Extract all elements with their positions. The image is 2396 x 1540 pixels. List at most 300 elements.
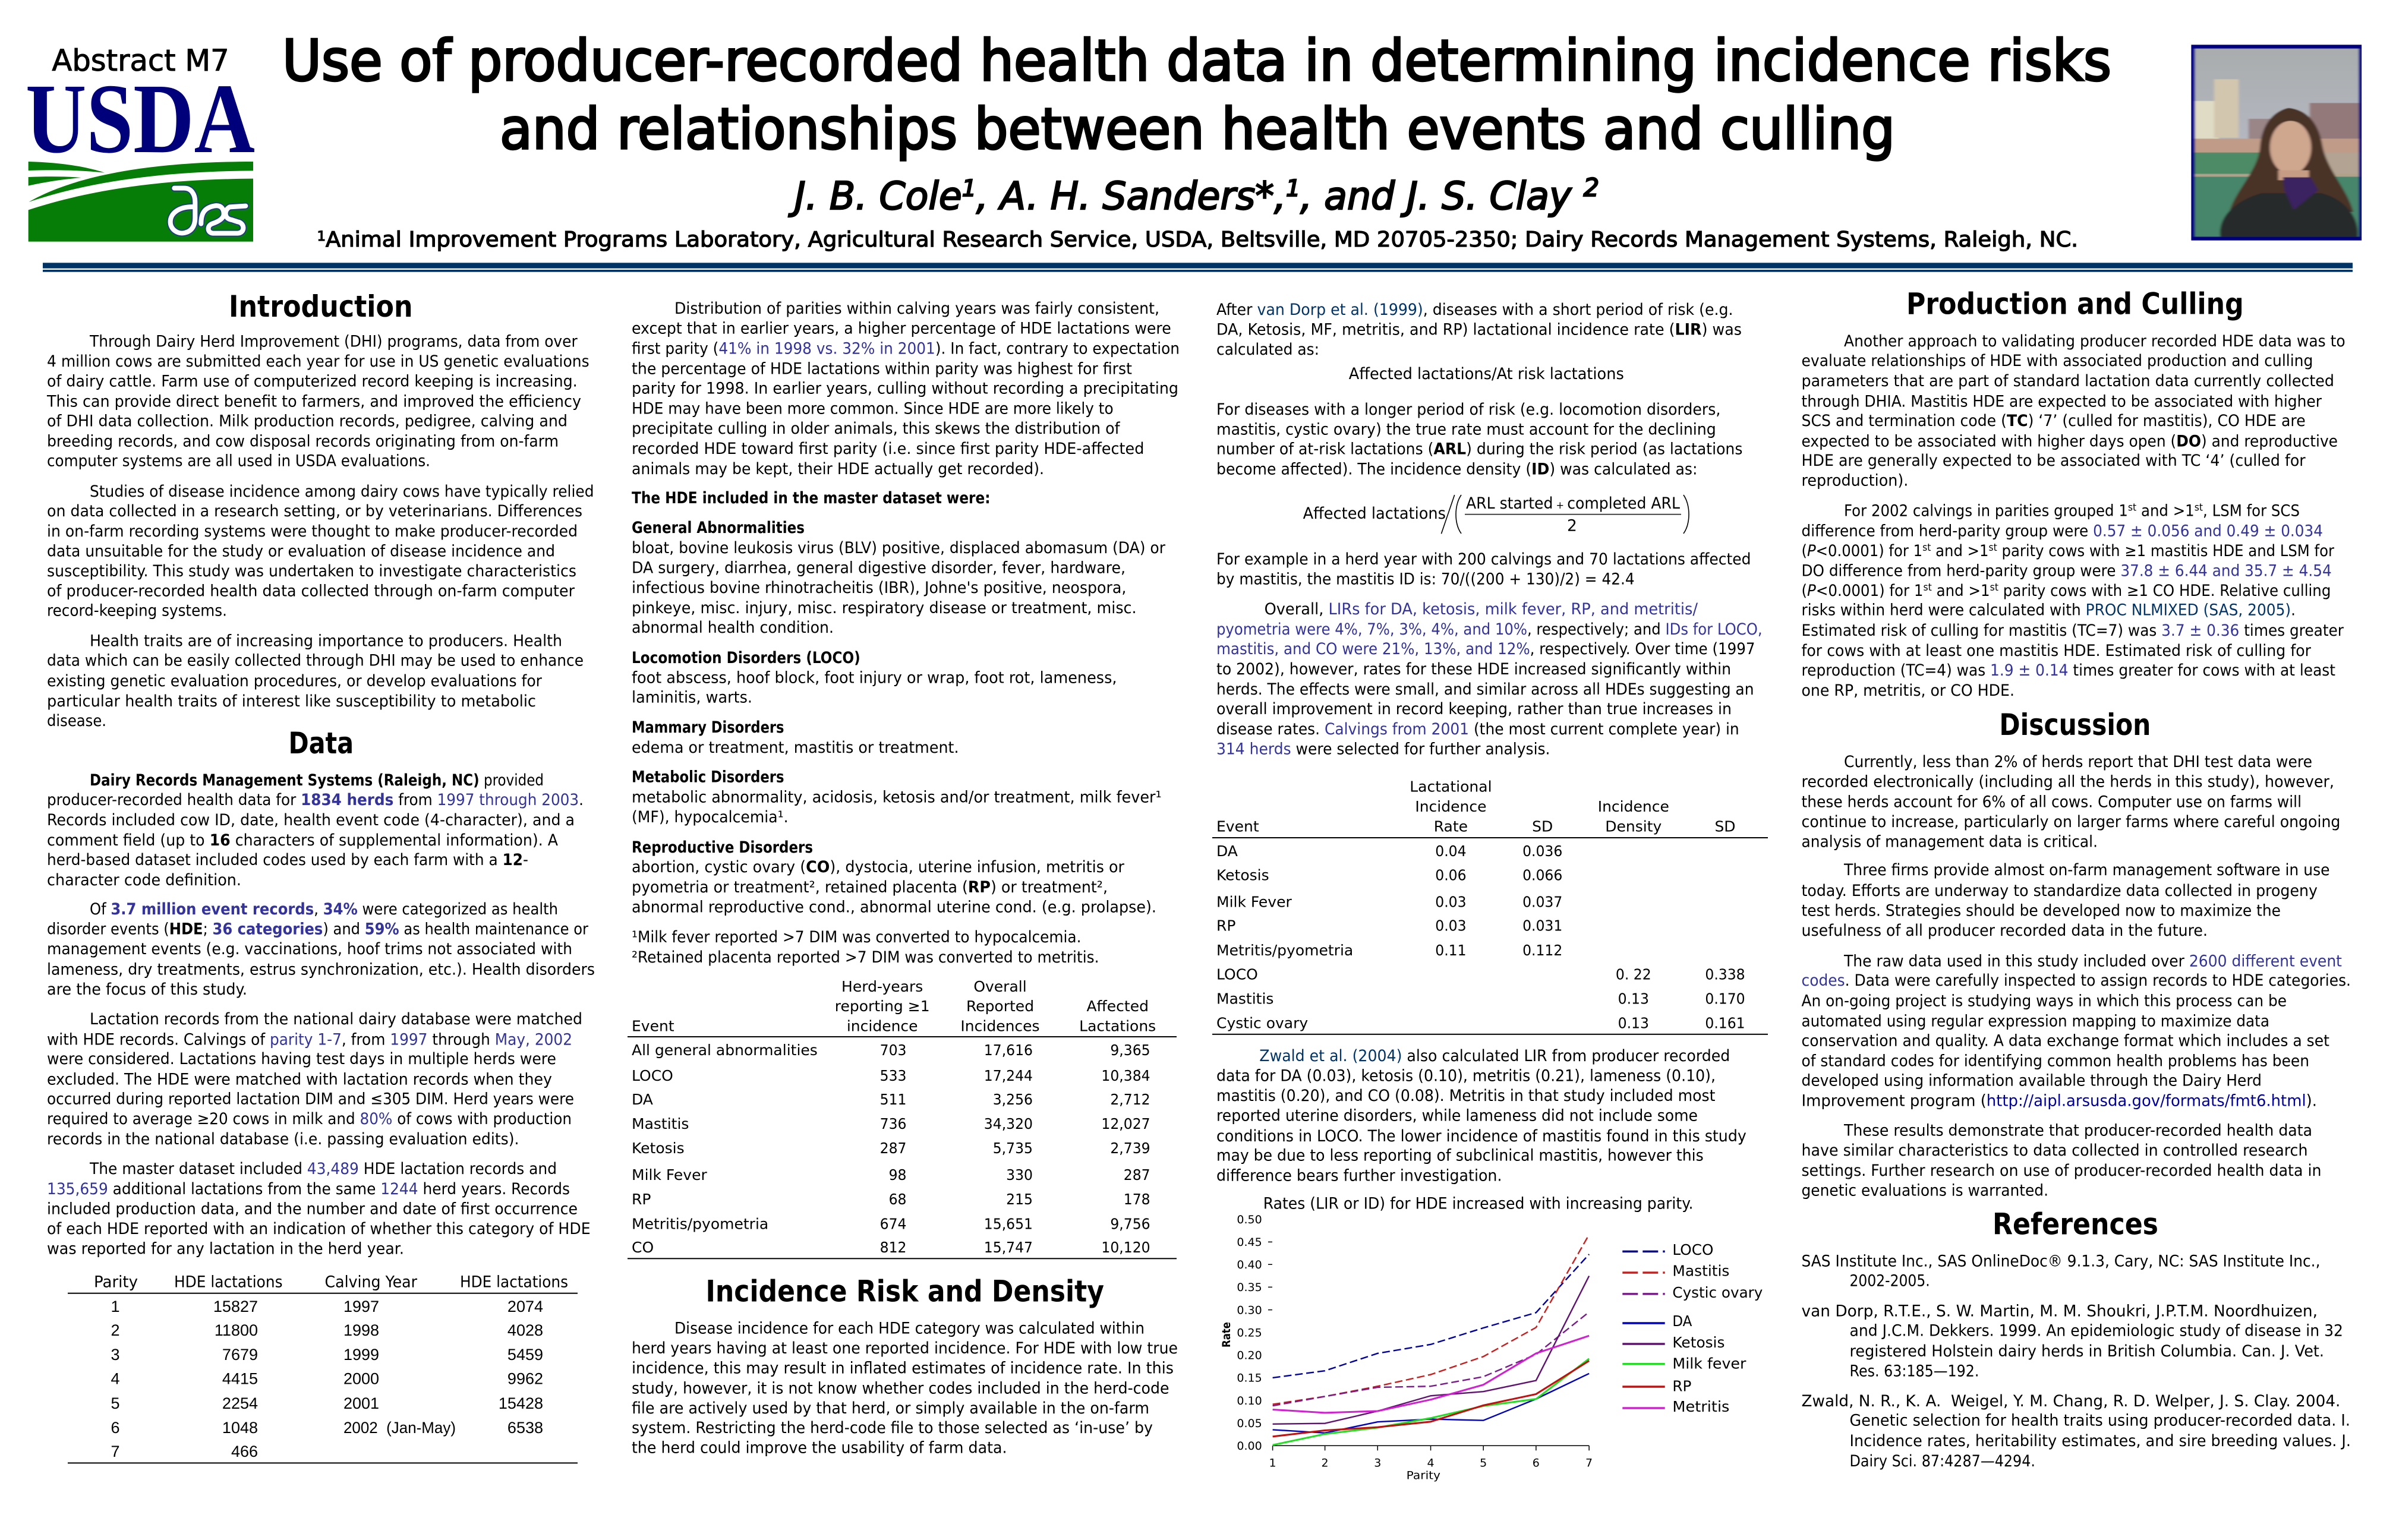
text block: data paragraphs: 135,659 additional lactations from the same 1244 herd years. Records: [47, 1180, 570, 1198]
text block: introduction paragraphs: of dairy cattle. Farm use of computerized record keeping is increasing.: [47, 373, 578, 391]
text block: HDE category lists: (MF), hypocalcemia¹.: [632, 808, 789, 826]
text block: reference list: [1802, 1252, 2351, 1470]
table: lactational incidence rate and incidence density: Density: [1605, 818, 1662, 835]
text block: introduction paragraphs: 4 million cows are submitted each year for use in US genetic evaluations: [47, 352, 589, 371]
table: reported incidences by event: 736: [880, 1115, 907, 1132]
text block: mastitis ID example and overall results: For example in a herd year with 200 calvings and 70 lactations affected: [1216, 550, 1751, 569]
table: reported incidences by event: Lactations: [1079, 1017, 1156, 1034]
text block: disease incidence: incidence, this may result in inflated estimates of incidence rate. In this: [632, 1359, 1174, 1378]
line chart: rates by parity: 2: [1322, 1457, 1329, 1470]
table: reported incidences by event: Reported: [966, 998, 1034, 1015]
authors: 1: [1286, 175, 1300, 201]
chart legend: Metritis: [1672, 1398, 1729, 1415]
text block: distribution of parities: [632, 299, 1180, 478]
line chart: rates by parity: 3: [1374, 1457, 1381, 1470]
text block: production and culling paragraphs: difference from herd-parity group were 0.57 ± 0.056 and 0.49 ± 0.034: [1802, 522, 2323, 540]
table: reported incidences by event: 330: [1006, 1166, 1033, 1184]
text block: Zwald comparison: data for DA (0.03), ketosis (0.10), metritis (0.21), lameness (0.10),: [1216, 1067, 1716, 1085]
line chart: rates by parity: 1: [1269, 1457, 1276, 1470]
table: lactational incidence rate and incidence density: 0. 22: [1616, 965, 1651, 983]
table: HDE lactations by parity and calving year: 1999: [343, 1346, 379, 1364]
table: HDE lactations by parity and calving year: [68, 1273, 578, 1463]
table: lactational incidence rate and incidence density: 0.037: [1522, 893, 1562, 911]
text block: discussion paragraphs: have similar characteristics to data collected in controlled research: [1802, 1141, 2308, 1160]
table: lactational incidence rate and incidence density: 0.170: [1705, 990, 1745, 1008]
table: reported incidences by event: 98: [889, 1166, 907, 1184]
text block: LIR definition: DA, Ketosis, MF, metritis, and RP) lactational incidence rate (LIR) was: [1216, 321, 1742, 339]
table: reported incidences by event: 9,365: [1110, 1041, 1150, 1059]
abstract number label: Abstract M7: [52, 43, 229, 78]
table: lactational incidence rate and incidence density: 0.066: [1522, 866, 1562, 884]
text block: discussion paragraphs: developed using information available through the Dairy Herd: [1802, 1071, 2262, 1090]
text block: data paragraphs: character code definition.: [47, 871, 241, 889]
table: lactational incidence rate and incidence density: 0.03: [1435, 893, 1467, 911]
icon: USDA ARS logo: USDA: [26, 64, 255, 174]
table: lactational incidence rate and incidence density: SD: [1714, 818, 1736, 835]
text block: reference list: Zwald, N. R., K. A. Weigel, Y. M. Chang, R. D. Welper, J. S. Clay. 2004.: [1802, 1392, 2340, 1410]
table: lactational incidence rate and incidence density: 0.11: [1435, 941, 1467, 959]
text block: HDE category lists: infectious bovine rhinotracheitis (IBR), Johne's positive, neospora,: [632, 579, 1126, 597]
text block: introduction paragraphs: particular health traits of interest like susceptibility to metabolic: [47, 692, 536, 711]
table: lactational incidence rate and incidence density: Milk Fever: [1216, 893, 1292, 910]
text block: data paragraphs: herd-based dataset included codes used by each farm with a 12-: [47, 851, 528, 869]
text block: mastitis ID example and overall results: 314 herds were selected for further analysis.: [1216, 740, 1550, 758]
icon: USDA ARS logo: [26, 64, 255, 242]
text block: data paragraphs: required to average ≥20 cows in milk and 80% of cows with production: [47, 1110, 572, 1128]
table: HDE lactations by parity and calving year: 5: [111, 1394, 120, 1412]
text block: introduction paragraphs: data unsuitable for the study or evaluation of disease incidence and: [47, 542, 555, 561]
text block: production and culling paragraphs: through DHIA. Mastitis HDE are expected to be associated with higher: [1802, 392, 2322, 411]
text block: HDE category lists: bloat, bovine leukosis virus (BLV) positive, displaced abomasum (DA) or: [632, 539, 1165, 557]
text block: distribution of parities: HDE may have been more common. Since HDE are more likely to: [632, 400, 1114, 418]
table: reported incidences by event: 15,747: [984, 1238, 1033, 1256]
text block: discussion paragraphs: these herds account for 6% of all cows. Computer use on farms will: [1802, 793, 2302, 811]
text block: ID definition: For diseases with a longer period of risk (e.g. locomotion disorders,: [1216, 400, 1720, 419]
table: reported incidences by event: Overall: [973, 978, 1027, 995]
chart legend: Ketosis: [1672, 1334, 1725, 1351]
table: HDE lactations by parity and calving year: 11800: [215, 1321, 258, 1339]
text block: introduction paragraphs: This can provide direct benefit to farmers, and improved the efficiency: [46, 392, 581, 411]
table: HDE lactations by parity and calving year: 6538: [507, 1419, 543, 1437]
table: lactational incidence rate and incidence density: 0.03: [1435, 917, 1467, 935]
heading: Data: Data: [289, 726, 354, 760]
line chart: rates by parity: 0.00: [1237, 1440, 1262, 1453]
table: reported incidences by event: 511: [880, 1090, 907, 1108]
text block: introduction paragraphs: Through Dairy Herd Improvement (DHI) programs, data from over: [89, 333, 578, 351]
table: HDE lactations by parity and calving year: Calving Year: [324, 1273, 417, 1291]
text block: LIR definition: [1216, 301, 1742, 359]
text block: discussion paragraphs: An on-going project is studying ways in which this process can be: [1802, 992, 2287, 1010]
text block: discussion paragraphs: analysis of management data is critical.: [1802, 832, 2098, 851]
heading: References: References: [1993, 1207, 2158, 1242]
table: reported incidences by event: 10,120: [1101, 1238, 1150, 1256]
table: HDE lactations by parity and calving year: 3: [111, 1346, 120, 1364]
heading: Production and Culling: Production and Culling: [1906, 287, 2244, 321]
table: HDE lactations by parity and calving year: 466: [231, 1443, 258, 1460]
text block: data paragraphs: [47, 771, 595, 1258]
text block: discussion paragraphs: The raw data used in this study included over 2600 different event: [1843, 952, 2342, 970]
chart legend: Mastitis: [1672, 1262, 1729, 1280]
text block: distribution of parities: animals may be kept, their HDE actually get recorded).: [632, 460, 1044, 478]
table: lactational incidence rate and incidence density: 0.031: [1522, 917, 1562, 935]
text block: reference list: SAS Institute Inc., SAS OnlineDoc® 9.1.3, Cary, NC: SAS Institute Inc.,: [1802, 1252, 2320, 1271]
text block: data paragraphs: was reported for any lactation in the herd year.: [47, 1239, 404, 1258]
formula: incidence density: [1303, 494, 1689, 535]
text block: production and culling paragraphs: st: [2128, 502, 2137, 514]
table: reported incidences by event: 5,735: [993, 1139, 1033, 1157]
text block: production and culling paragraphs: (P<0.0001) for 1: [1802, 582, 1932, 600]
text block: production and culling paragraphs: evaluate relationships of HDE with associated production and culling: [1802, 352, 2313, 370]
text block: production and culling paragraphs: HDE are generally expected to be associated with TC ‘4’ (culled for: [1802, 452, 2306, 470]
line chart: rates by parity: 0.30: [1237, 1304, 1262, 1317]
text block: disease incidence: Disease incidence for each HDE category was calculated within: [674, 1320, 1145, 1338]
text block: discussion paragraphs: conservation and quality. A data exchange format which includes a set: [1802, 1031, 2329, 1050]
text block: discussion paragraphs: continue to increase, particularly on larger farms where careful ongoing: [1802, 813, 2340, 831]
text block: discussion paragraphs: test herds. Strategies should be developed now to maximize the: [1802, 902, 2281, 920]
text block: distribution of parities: the percentage of HDE lactations within parity was highest for first: [632, 359, 1132, 378]
panel: production and culling: [1802, 287, 2345, 700]
table: reported incidences by event: 287: [1124, 1166, 1150, 1184]
text block: mastitis ID example and overall results: disease rates. Calvings from 2001 (the most current complete year) in: [1216, 720, 1739, 739]
table: HDE lactations by parity and calving year: 1: [111, 1298, 120, 1315]
table: reported incidences by event: 10,384: [1101, 1066, 1150, 1084]
text block: production and culling paragraphs: parameters that are part of standard lactation data currently collected: [1802, 372, 2334, 390]
panel: incidence risk and density: [632, 301, 1768, 1482]
text block: production and culling paragraphs: For 2002 calvings in parities grouped 1: [1844, 502, 2152, 520]
text block: data paragraphs: were considered. Lactations having test days in multiple herds were: [47, 1050, 556, 1068]
affiliations: Animal Improvement Programs Laboratory, Agricultural Research Service, USDA, Beltsville, MD 20705-2350; Dairy Records Management Systems, Raleigh, NC.: [326, 228, 2078, 252]
text block: production and culling paragraphs: expected to be associated with higher days open (DO) and reproductive: [1802, 432, 2338, 450]
text block: data paragraphs: included production data, and the number and date of first occurrence: [47, 1200, 578, 1218]
line chart: rates by parity: 0.25: [1237, 1327, 1262, 1340]
text block: discussion paragraphs: genetic evaluations is warranted.: [1802, 1182, 2048, 1200]
table: HDE lactations by parity and calving year: 15827: [213, 1298, 258, 1315]
text block: ID definition: become affected). The incidence density (ID) was calculated as:: [1216, 460, 1697, 478]
text block: data paragraphs: disorder events (HDE; 36 categories) and 59% as health maintenance or: [47, 920, 588, 939]
table: lactational incidence rate and incidence density: RP: [1216, 917, 1235, 935]
text block: data paragraphs: occurred during reported lactation DIM and ≤305 DIM. Herd years were: [47, 1090, 574, 1108]
text block: production and culling paragraphs: st: [1990, 582, 1998, 594]
header divider rules: [43, 263, 2353, 272]
table: HDE lactations by parity and calving year: Parity: [94, 1273, 138, 1291]
table: lactational incidence rate and incidence density: Rate: [1434, 818, 1468, 835]
text block: data paragraphs: producer-recorded health data for 1834 herds from 1997 through 2003.: [47, 791, 584, 809]
table: lactational incidence rate and incidence density: Lactational: [1410, 778, 1492, 796]
table: reported incidences by event: 533: [880, 1066, 907, 1084]
text block: Zwald comparison: reported uterine disorders, while lameness did not include some: [1216, 1107, 1698, 1125]
text block: discussion paragraphs: These results demonstrate that producer-recorded health data: [1843, 1122, 2312, 1140]
authors: 1: [962, 175, 976, 201]
text block: disease incidence: study, however, it is not know whether codes included in the herd-code: [632, 1380, 1169, 1398]
table: reported incidences by event: 17,244: [984, 1066, 1033, 1084]
text block: reference list: Incidence rates, heritability estimates, and sire breeding values. J.: [1849, 1432, 2351, 1450]
table: HDE lactations by parity and calving year: 15428: [499, 1394, 543, 1412]
line chart: rates by parity: 0.40: [1237, 1258, 1262, 1271]
text block: production and culling paragraphs: SCS and termination code (TC) ‘7’ (culled for mastitis), CO HDE are: [1802, 412, 2306, 430]
text block: data paragraphs: of each HDE reported with an indication of whether this category of HDE: [47, 1220, 591, 1238]
chart legend: DA: [1672, 1312, 1692, 1330]
text block: mastitis ID example and overall results: by mastitis, the mastitis ID is: 70/((200 + 130)/2) = 42.4: [1216, 570, 1635, 589]
formula: incidence density: Affected lactations: [1303, 504, 1446, 523]
text block: reference list: Res. 63:185—192.: [1849, 1362, 1979, 1380]
text block: discussion paragraphs: Improvement program (http://aipl.arsusda.gov/formats/fmt6.html).: [1802, 1092, 2317, 1110]
text block: Zwald comparison: difference bears further investigation.: [1216, 1167, 1502, 1185]
text block: data paragraphs: comment field (up to 16 characters of supplemental information). A: [47, 831, 558, 850]
table: HDE lactations by parity and calving year: 5459: [507, 1346, 543, 1364]
text block: production and culling paragraphs: and >1: [2136, 502, 2195, 520]
text block: HDE category lists: edema or treatment, mastitis or treatment.: [632, 739, 959, 757]
text block: reference list: van Dorp, R.T.E., S. W. Martin, M. M. Shoukri, J.P.T.M. Noordhuizen,: [1802, 1302, 2318, 1321]
table: lactational incidence rate and incidence density: SD: [1532, 818, 1553, 835]
table: HDE lactations by parity and calving year: 2074: [507, 1298, 543, 1315]
text block: discussion paragraphs: settings. Further research on use of producer-recorded health data in: [1802, 1162, 2321, 1180]
text block: disease incidence: file are actively used by that herd, or simply available in the on-farm: [632, 1399, 1149, 1418]
line chart: rates by parity: 6: [1533, 1457, 1540, 1470]
table: reported incidences by event: 812: [880, 1238, 907, 1256]
text block: data paragraphs: are the focus of this study.: [47, 980, 247, 999]
table: lactational incidence rate and incidence density: 0.036: [1522, 842, 1562, 860]
text block: HDE category lists: DA surgery, diarrhea, general digestive disorder, fever, hardware,: [632, 558, 1126, 578]
table: reported incidences by event: 287: [880, 1139, 907, 1157]
text block: production and culling paragraphs: Another approach to validating producer recorded HDE data was to: [1844, 332, 2345, 351]
table: reported incidences by event: 3,256: [993, 1090, 1033, 1108]
text block: introduction paragraphs: of DHI data collection. Milk production records, pedigree, calving and: [47, 412, 568, 431]
authors: 2: [1584, 173, 1599, 202]
chart legend: RP: [1672, 1377, 1691, 1394]
text block: production and culling paragraphs: reproduction (TC=4) was 1.9 ± 0.14 times greater for cows with at least: [1802, 661, 2335, 680]
text block: production and culling paragraphs: (P<0.0001) for 1: [1802, 542, 1932, 560]
line chart: rates by parity: 0.50: [1237, 1213, 1262, 1226]
table: reported incidences by event: Metritis/pyometria: [632, 1215, 768, 1232]
table: HDE lactations by parity and calving year: 7: [111, 1443, 120, 1460]
table: lactational incidence rate and incidence density: Incidence: [1415, 798, 1486, 815]
table: reported incidences by event: Milk Fever: [632, 1166, 707, 1184]
text block: production and culling paragraphs: one RP, metritis, or CO HDE.: [1802, 681, 2014, 700]
text block: data paragraphs: records in the national database (i.e. passing evaluation edits).: [47, 1130, 519, 1148]
text block: Zwald comparison: mastitis (0.20), and CO (0.08). Metritis in that study included most: [1216, 1087, 1715, 1105]
text block: mastitis ID example and overall results: mastitis, and CO were 21%, 13%, and 12%, respectively. Over time (1997: [1216, 640, 1755, 658]
table: reported incidences by event: LOCO: [632, 1067, 673, 1084]
table: lactational incidence rate and incidence density: 0.06: [1435, 866, 1467, 884]
table: lactational incidence rate and incidence density: 0.112: [1522, 941, 1562, 959]
heading: Introduction: Introduction: [229, 289, 412, 324]
text block: HDE category lists: Locomotion Disorders (LOCO): [632, 649, 860, 667]
text block: reference list: 2002-2005.: [1849, 1271, 1930, 1290]
line chart: rates by parity: Rate: [1220, 1322, 1233, 1348]
heading: Incidence Risk and Density: Incidence Risk and Density: [706, 1274, 1104, 1309]
panel: data: [47, 726, 595, 1463]
text block: production and culling paragraphs: parity cows with ≥1 mastitis HDE and LSM for: [1997, 542, 2334, 560]
text block: introduction paragraphs: Studies of disease incidence among dairy cows have typically relied: [90, 482, 594, 501]
table: reported incidences by event: reporting ≥1: [835, 998, 930, 1015]
text block: discussion paragraphs: today. Efforts are underway to standardize data collected in progeny: [1802, 882, 2318, 900]
text block: HDE category lists: Metabolic Disorders: [632, 768, 784, 787]
table: HDE lactations by parity and calving year: 1048: [222, 1419, 258, 1437]
chart legend: [1622, 1241, 1763, 1415]
table: lactational incidence rate and incidence density: 0.13: [1618, 1014, 1649, 1032]
table: lactational incidence rate and incidence density: 0.04: [1435, 842, 1467, 860]
table: reported incidences by event: 68: [889, 1190, 907, 1208]
line chart: rates by parity: [1220, 1213, 1593, 1482]
text block: discussion paragraphs: of standard codes for identifying common health problems has been: [1802, 1052, 2309, 1071]
text block: HDE category lists: foot abscess, hoof block, foot injury or wrap, foot rot, lameness,: [632, 668, 1117, 687]
text block: HDE category lists: ¹Milk fever reported >7 DIM was converted to hypocalcemia.: [632, 928, 1082, 946]
table: HDE lactations by parity and calving year: 9962: [507, 1370, 543, 1388]
text block: disease incidence: [632, 1320, 1178, 1457]
text block: data paragraphs: management events (e.g. vaccinations, hoof trims not associated with: [47, 940, 572, 958]
text block: production and culling paragraphs: risks within herd were calculated with PROC NLMIXED (SAS, 2005).: [1802, 601, 2296, 620]
text block: introduction paragraphs: breeding records, and cow disposal records originating from on-farm: [47, 432, 559, 450]
text block: distribution of parities: parity for 1998. In earlier years, culling without recording a precipitating: [632, 380, 1178, 398]
table: reported incidences by event: 674: [880, 1215, 907, 1232]
text block: Zwald comparison: [1216, 1047, 1746, 1185]
table: reported incidences by event: 34,320: [984, 1115, 1033, 1132]
text block: data paragraphs: Of 3.7 million event records, 34% were categorized as health: [90, 900, 558, 919]
text block: mastitis ID example and overall results: [1216, 550, 1763, 758]
table: reported incidences by event: 178: [1124, 1190, 1150, 1208]
text block: distribution of parities: precipitate culling in older animals, this skews the distribution of: [632, 419, 1120, 438]
table: lactational incidence rate and incidence density: 0.338: [1705, 965, 1745, 983]
text block: production and culling paragraphs: Estimated risk of culling for mastitis (TC=7) was 3.7 ± 0.36 times greater: [1802, 621, 2344, 640]
text block: production and culling paragraphs: reproduction).: [1802, 472, 1908, 490]
text block: production and culling paragraphs: parity cows with ≥1 CO HDE. Relative culling: [1998, 582, 2331, 600]
table: HDE lactations by parity and calving year: 2002 (Jan-May): [343, 1419, 456, 1437]
line chart: rates by parity: 0.20: [1237, 1349, 1262, 1362]
text block: Zwald comparison: may be due to less reporting of subclinical mastitis, however this: [1216, 1147, 1704, 1165]
chart legend: Cystic ovary: [1672, 1284, 1763, 1301]
text block: ID definition: [1216, 400, 1742, 478]
table: lactational incidence rate and incidence density: [1212, 778, 1768, 1035]
line chart: rates by parity: 5: [1480, 1457, 1487, 1470]
text block: HDE category lists: abnormal reproductive cond., abnormal uterine cond. (e.g. prolapse).: [632, 898, 1156, 916]
text block: discussion paragraphs: codes. Data were carefully inspected to assign records to HDE categories.: [1802, 971, 2351, 990]
authors: , and J. S. Clay: [1300, 175, 1584, 219]
text block: production and culling paragraphs: and >1: [1931, 542, 1989, 560]
table: lactational incidence rate and incidence density: Incidence: [1598, 798, 1669, 815]
table: HDE lactations by parity and calving year: 2: [111, 1321, 120, 1339]
text block: reference list: Dairy Sci. 87:4287—4294.: [1849, 1452, 2035, 1470]
heading: Discussion: Discussion: [1999, 708, 2151, 742]
title: Use of producer-recorded health data in determining incidence risks: [282, 29, 2111, 94]
text block: production and culling paragraphs: st: [1989, 542, 1997, 554]
text block: distribution of parities: except that in earlier years, a higher percentage of HDE lactations were: [632, 319, 1171, 337]
table: HDE lactations by parity and calving year: 2001: [343, 1394, 379, 1412]
text block: data paragraphs: excluded. The HDE were matched with lactation records when they: [47, 1070, 552, 1088]
table: reported incidences by event: 2,712: [1110, 1090, 1150, 1108]
authors: , A. H. Sanders*,: [976, 175, 1286, 219]
table: lactational incidence rate and incidence density: DA: [1216, 842, 1238, 860]
text block: HDE category lists: General Abnormalities: [632, 519, 805, 537]
table: lactational incidence rate and incidence density: LOCO: [1216, 965, 1258, 983]
table: HDE lactations by parity and calving year: HDE lactations: [174, 1273, 283, 1291]
table: HDE lactations by parity and calving year: 2000: [343, 1370, 379, 1388]
table: HDE lactations by parity and calving year: 6: [111, 1419, 120, 1437]
text block: Zwald comparison: conditions in LOCO. The lower incidence of mastitis found in this study: [1216, 1127, 1746, 1145]
text block: HDE category lists: abnormal health condition.: [632, 618, 834, 637]
text block: introduction paragraphs: [46, 333, 594, 730]
table: lactational incidence rate and incidence density: Cystic ovary: [1216, 1015, 1308, 1032]
text block: introduction paragraphs: computer systems are all used in USDA evaluations.: [47, 452, 430, 471]
text block: introduction paragraphs: existing genetic evaluation procedures, or develop evaluations for: [47, 672, 542, 690]
text block: reference list: registered Holstein dairy herds in British Columbia. Can. J. Vet.: [1849, 1342, 2324, 1361]
line chart: rates by parity: 0.05: [1237, 1417, 1262, 1430]
formula: lactational incidence rate: Affected lactations/At risk lactations: [1349, 365, 1624, 383]
table: reported incidences by event: Ketosis: [632, 1140, 685, 1157]
text block: data paragraphs: The master dataset included 43,489 HDE lactation records and: [89, 1160, 557, 1178]
text block: production and culling paragraphs: [1802, 332, 2345, 700]
table: lactational incidence rate and incidence density: 0.161: [1705, 1014, 1745, 1032]
text block: mastitis ID example and overall results: Overall, LIRs for DA, ketosis, milk fever, RP, and metritis/: [1265, 600, 1698, 618]
table: reported incidences by event: 2,739: [1110, 1139, 1150, 1157]
table: HDE lactations by parity and calving year: 4028: [507, 1321, 543, 1339]
text block: production and culling paragraphs: st: [1922, 542, 1931, 554]
text block: HDE category lists: ²Retained placenta reported >7 DIM was converted to metritis.: [632, 948, 1099, 967]
text block: disease incidence: the herd could improve the usability of farm data.: [632, 1439, 1007, 1457]
text block: HDE category lists: laminitis, warts.: [632, 689, 752, 707]
table: reported incidences by event: 215: [1006, 1190, 1033, 1208]
text block: discussion paragraphs: [1802, 753, 2351, 1200]
table: reported incidences by event: Herd-years: [841, 978, 923, 995]
table: HDE lactations by parity and calving year: HDE lactations: [460, 1273, 568, 1291]
text block: HDE category lists: [632, 489, 1165, 967]
text block: HDE category lists: Mammary Disorders: [632, 718, 784, 737]
formula: incidence density: ARL started + completed ARL: [1466, 494, 1680, 513]
text block: production and culling paragraphs: for cows with at least one mastitis HDE. Estimated risk of culling for: [1802, 642, 2311, 660]
table: reported incidences by event: 15,651: [984, 1215, 1033, 1232]
table: HDE lactations by parity and calving year: 4: [111, 1370, 120, 1388]
panel: HDE categories: [628, 299, 1180, 1259]
table: HDE lactations by parity and calving year: 1998: [343, 1321, 379, 1339]
table: reported incidences by event: 17,616: [984, 1041, 1033, 1059]
text block: reference list: and J.C.M. Dekkers. 1999. An epidemiologic study of disease in 32: [1849, 1322, 2343, 1340]
table: lactational incidence rate and incidence density: 0.13: [1618, 990, 1649, 1008]
table: reported incidences by event: 703: [880, 1041, 907, 1059]
text block: HDE category lists: abortion, cystic ovary (CO), dystocia, uterine infusion, metritis or: [632, 858, 1124, 876]
text block: introduction paragraphs: of producer-recorded health data collected through on-farm computer: [47, 582, 575, 601]
text block: data paragraphs: Lactation records from the national dairy database were matched: [90, 1010, 582, 1028]
text block: LIR definition: After van Dorp et al. (1999), diseases with a short period of risk (e.g.: [1216, 301, 1733, 319]
table: lactational incidence rate and incidence density: Mastitis: [1216, 990, 1273, 1008]
table: reported incidences by event: CO: [632, 1239, 654, 1256]
table: reported incidences by event: Mastitis: [632, 1115, 689, 1132]
line chart: rates by parity: 0.15: [1237, 1372, 1262, 1385]
line chart: rates by parity: 7: [1585, 1457, 1593, 1470]
text block: disease incidence: herd years having at least one reported incidence. For HDE with low true: [632, 1339, 1178, 1358]
text block: HDE category lists: metabolic abnormality, acidosis, ketosis and/or treatment, milk fever¹: [632, 788, 1162, 807]
table: reported incidences by event: 12,027: [1101, 1115, 1150, 1132]
text block: data paragraphs: Records included cow ID, date, health event code (4-character), and a: [47, 811, 575, 829]
text block: introduction paragraphs: data which can be easily collected through DHI may be used to enhance: [47, 652, 584, 670]
text block: introduction paragraphs: disease.: [47, 712, 106, 730]
table: reported incidences by event: Incidences: [960, 1017, 1040, 1034]
table: lactational incidence rate and incidence density: Event: [1216, 818, 1259, 835]
text block: mastitis ID example and overall results: to 2002), however, rates for these HDE increased significantly within: [1216, 660, 1731, 679]
panel: discussion: [1802, 708, 2351, 1200]
text block: discussion paragraphs: Currently, less than 2% of herds report that DHI test data were: [1844, 753, 2312, 771]
text block: production and culling paragraphs: st: [1923, 582, 1932, 594]
text block: HDE category lists: pyometria or treatment², retained placenta (RP) or treatment²,: [632, 878, 1108, 897]
text block: mastitis ID example and overall results: herds. The effects were small, and similar across all HDEs suggesting an: [1216, 680, 1754, 699]
text block: production and culling paragraphs: , LSM for SCS: [2203, 502, 2300, 520]
text block: ID definition: number of at-risk lactations (ARL) during the risk period (as lactations: [1216, 440, 1742, 459]
panel: introduction: [46, 289, 594, 730]
table: reported incidences by event: Affected: [1086, 998, 1149, 1015]
text block: data paragraphs: lameness, dry treatments, estrus synchronization, etc.). Health disorders: [47, 960, 595, 979]
formula: incidence density: 2: [1567, 516, 1577, 535]
chart caption: Rates (LIR or ID) for HDE increased with increasing parity.: [1263, 1194, 1694, 1213]
text block: ID definition: mastitis, cystic ovary) the true rate must account for the declining: [1216, 421, 1716, 438]
table: reported incidences by event: Event: [632, 1017, 674, 1034]
